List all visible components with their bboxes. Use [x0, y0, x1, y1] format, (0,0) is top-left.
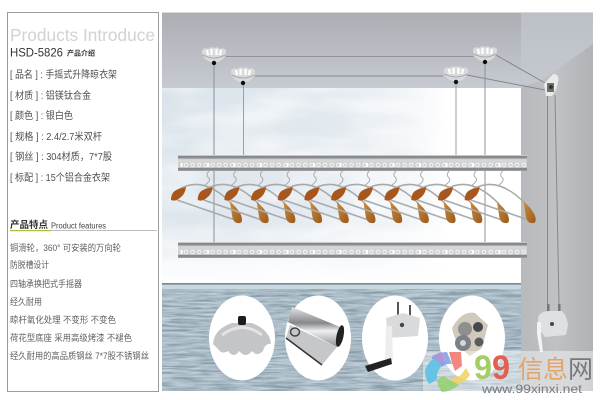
specification list: [ 钢丝 ] : 304材质，7*7股	[10, 150, 112, 163]
heading: product features: 产品特点	[10, 219, 49, 231]
wall	[162, 12, 593, 391]
icon: colourful ring logo	[425, 352, 470, 392]
watermark: 99xinxi.net logo	[423, 349, 593, 396]
features list	[10, 242, 149, 361]
specification list: [ 规格 ] : 2.4/2.7米双杆	[10, 130, 102, 143]
features list: 荷花型底座 采用高级烤漆 不褪色	[10, 332, 132, 343]
detail photo: hand crank	[362, 296, 428, 380]
features list: 晾杆氧化处理 不变形 不变色	[10, 314, 116, 325]
detail photo: aluminum rail	[285, 296, 351, 380]
sky	[162, 88, 521, 283]
model number: 产品介绍	[67, 48, 95, 58]
features list: 四轴承换把式手摇器	[10, 278, 82, 289]
text: website url: www.99xinxi.net	[481, 384, 583, 396]
text: 信息网: 网	[568, 356, 593, 384]
heading: product features: Product features	[51, 222, 106, 230]
text: 99	[474, 349, 510, 387]
text: 信息网: 信息	[518, 356, 568, 384]
specification list	[10, 68, 117, 184]
text: 99: 9	[474, 349, 492, 387]
corner pulley	[544, 74, 558, 96]
title: Products Introduce: Products Introduce	[10, 25, 155, 45]
detail photo: gear mechanism	[439, 296, 505, 380]
text: 99: 9	[492, 349, 510, 387]
features list: 防脱槽设计	[10, 259, 49, 270]
specification list: [ 材质 ] : 铝镁钛合金	[10, 89, 91, 102]
ceiling mounts	[202, 46, 497, 85]
specification list: [ 标配 ] : 15个铝合金衣架	[10, 171, 110, 184]
specification list: [ 品名 ] : 手摇式升降晾衣架	[10, 68, 117, 81]
bottom rail	[178, 242, 527, 258]
features list: 铜滑轮，360° 可安装的万向轮	[10, 242, 121, 253]
hangers	[171, 171, 536, 223]
model number	[10, 46, 95, 60]
model number: HSD-5826	[10, 46, 63, 60]
cables	[214, 55, 559, 305]
detail photo: ceiling mount	[209, 296, 275, 380]
features list: 经久耐用的高品质钢丝 7*7股不锈钢丝	[10, 350, 149, 361]
features list: 经久耐用	[10, 296, 42, 307]
crank winder on wall	[537, 304, 568, 352]
sea	[162, 283, 521, 391]
ceiling	[162, 12, 593, 89]
top rail	[178, 155, 527, 171]
scene: room with window	[162, 12, 593, 391]
text: 信息网	[518, 356, 593, 384]
specification list: [ 颜色 ] : 银白色	[10, 109, 73, 122]
panel: product introduction	[8, 12, 158, 392]
heading: product features	[10, 219, 157, 231]
